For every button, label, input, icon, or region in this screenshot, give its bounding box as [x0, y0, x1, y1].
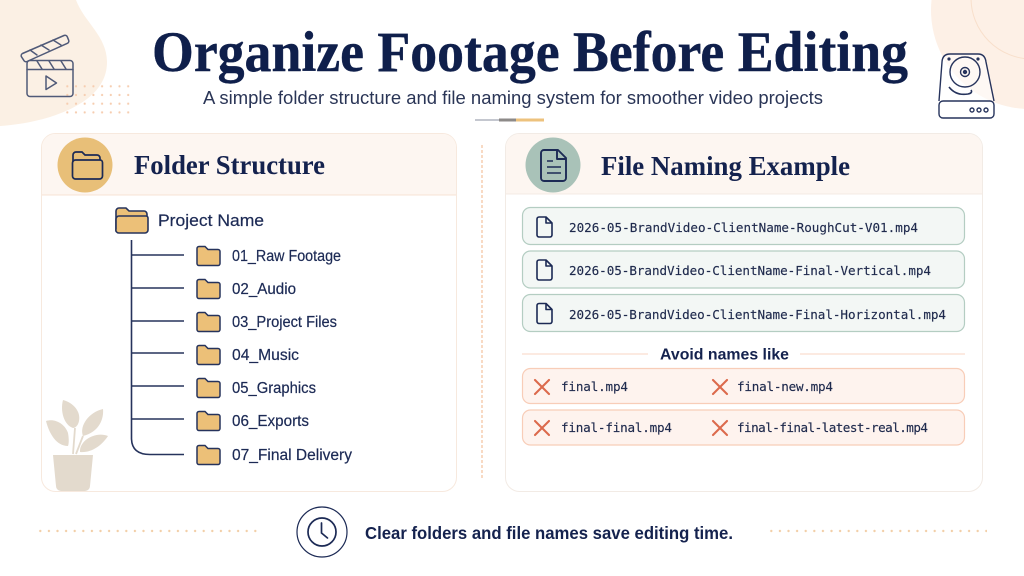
folder row: 01_Raw Footage: 01_Raw Footage: [232, 248, 341, 265]
panel header: folder structure: [42, 134, 456, 195]
avoid row 1: final-new.mp4: [737, 379, 833, 394]
heading: file naming example: File Naming Example: [601, 150, 850, 181]
folder row: 06_Exports: 06_Exports: [232, 413, 309, 430]
icon: document in circle: [526, 138, 580, 192]
file row 3: [522, 294, 964, 332]
background blob: top left: [0, 0, 107, 126]
file row 2: [522, 251, 964, 288]
file row 2: 2026-05-BrandVideo-ClientName-Final-Vertical.mp4: [569, 263, 931, 278]
panel: folder structure: [42, 134, 456, 492]
avoid row 1: final.mp4: [561, 379, 628, 394]
folder row: 04_Music: [197, 346, 299, 364]
folder row: 04_Music: 04_Music: [232, 347, 299, 364]
folder row: 07_Final Delivery: [197, 446, 352, 464]
tree root: project name: Project Name: [158, 211, 264, 230]
dot pattern: top left: [63, 82, 133, 117]
subtitle: A simple folder structure and file naming system for smoother video projects: [203, 88, 823, 108]
tree root: project name: [116, 208, 264, 233]
icon: potted plant: [46, 400, 108, 491]
folder row: 05_Graphics: [197, 378, 316, 398]
panel: file naming example: [506, 134, 982, 492]
folder row: 03_Project Files: [197, 312, 337, 332]
folder row: 05_Graphics: 05_Graphics: [232, 380, 316, 397]
title: Organize Footage Before Editing: [152, 21, 908, 84]
footer dots: left: [36, 528, 260, 534]
avoid row 1: [522, 368, 964, 404]
footer message: Clear folders and file names save editing time.: [365, 523, 733, 543]
file row 3: 2026-05-BrandVideo-ClientName-Final-Horizontal.mp4: [569, 307, 946, 322]
icon: folder in circle: [58, 138, 112, 192]
heading: folder structure: Folder Structure: [134, 149, 325, 180]
background circle: top right: [931, 0, 1024, 109]
folder row: 02_Audio: 02_Audio: [232, 281, 296, 298]
avoid row 2: final-final.mp4: [561, 420, 672, 435]
icon: hard drive: [939, 54, 994, 118]
file row 1: [522, 208, 964, 244]
avoid row 2: [522, 410, 964, 445]
file row 1: 2026-05-BrandVideo-ClientName-RoughCut-V01.mp4: [569, 220, 918, 235]
title divider: [475, 118, 544, 122]
tree connector lines: [132, 240, 184, 454]
footer dots: right: [765, 528, 987, 534]
icon: clock: [297, 507, 347, 557]
folder row: 06_Exports: [197, 412, 309, 430]
icon: clapperboard: [21, 35, 73, 96]
folder row: 01_Raw Footage: [197, 246, 341, 266]
folder row: 07_Final Delivery: 07_Final Delivery: [232, 447, 352, 464]
panel header: file naming: [506, 134, 982, 194]
center dashed divider: [481, 145, 483, 478]
folder row: 02_Audio: [197, 280, 296, 298]
avoid row 2: final-final-latest-real.mp4: [737, 420, 928, 435]
heading: avoid names like: Avoid names like: [660, 346, 789, 364]
folder row: 03_Project Files: 03_Project Files: [232, 314, 337, 331]
